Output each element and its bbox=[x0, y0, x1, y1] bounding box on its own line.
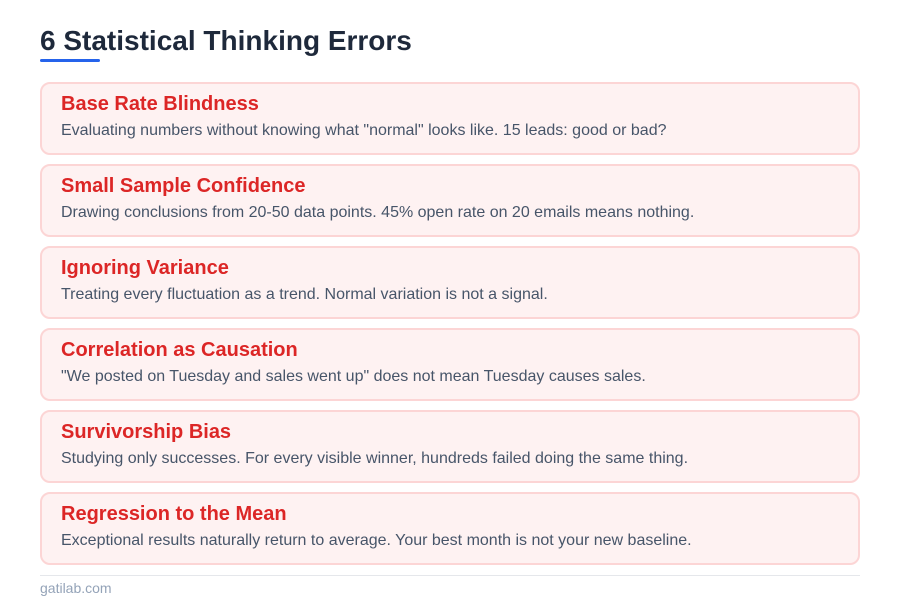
title underline bbox=[40, 59, 100, 62]
card: base rate blindness: Evaluating numbers without knowing what "normal" looks like. 15 leads: good or bad? bbox=[61, 122, 666, 139]
card: survivorship bias bbox=[40, 410, 860, 483]
card: correlation as causation: "We posted on Tuesday and sales went up" does not mean Tuesday causes sales. bbox=[61, 368, 646, 385]
card: ignoring variance bbox=[40, 246, 860, 319]
card: correlation as causation: Correlation as Causation bbox=[61, 339, 298, 361]
card: regression to the mean bbox=[40, 492, 860, 565]
card: small sample confidence: Small Sample Confidence bbox=[61, 175, 306, 197]
card: base rate blindness: Base Rate Blindness bbox=[61, 93, 259, 115]
card: survivorship bias: Survivorship Bias bbox=[61, 421, 231, 443]
card: small sample confidence bbox=[40, 164, 860, 237]
card: small sample confidence: Drawing conclusions from 20-50 data points. 45% open rate on 20 emails means nothing. bbox=[61, 204, 694, 221]
card: regression to the mean: Regression to the Mean bbox=[61, 503, 287, 525]
card: correlation as causation bbox=[40, 328, 860, 401]
card: regression to the mean: Exceptional results naturally return to average. Your best month is not your new baseline. bbox=[61, 532, 692, 549]
footer: gatilab.com bbox=[40, 580, 112, 596]
title: 6 Statistical Thinking Errors bbox=[40, 25, 412, 56]
card: base rate blindness bbox=[40, 82, 860, 155]
card: survivorship bias: Studying only successes. For every visible winner, hundreds failed doing the same thing. bbox=[61, 450, 688, 467]
card: ignoring variance: Treating every fluctuation as a trend. Normal variation is not a signal. bbox=[61, 286, 548, 303]
card: ignoring variance: Ignoring Variance bbox=[61, 257, 229, 279]
